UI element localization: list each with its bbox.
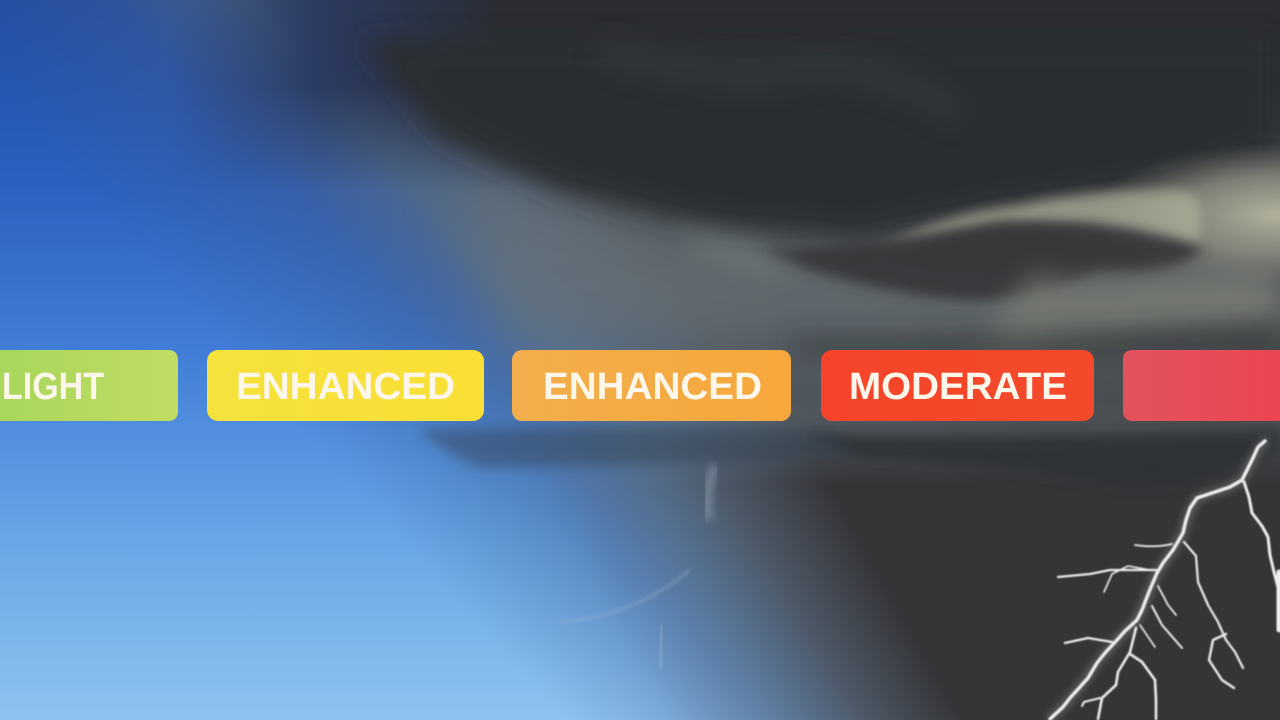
upper dark storm cloud xyxy=(191,0,1280,244)
lightning bolt xyxy=(1050,441,1280,719)
pill: enhanced yellow: ENHANCED xyxy=(236,366,455,408)
pill: enhanced orange xyxy=(512,350,791,421)
mid branch xyxy=(1184,542,1243,668)
right branch xyxy=(1244,482,1280,595)
pill: light: LIGHT xyxy=(2,366,104,408)
risk scale pills xyxy=(0,350,1280,421)
main bolt glow xyxy=(1050,441,1265,719)
pill: moderate: MODERATE xyxy=(849,366,1067,408)
pill: light xyxy=(0,350,178,421)
bright cloud highlights xyxy=(670,130,1280,350)
faint distant lightning xyxy=(560,465,715,670)
pill: enhanced yellow xyxy=(207,350,484,421)
lower dark storm area xyxy=(564,445,1280,720)
pill: high, cropped xyxy=(1123,350,1280,421)
main stem xyxy=(1050,441,1265,719)
lower fork xyxy=(1098,628,1136,719)
dark cloud band behind scale xyxy=(420,322,1280,486)
left branches xyxy=(1135,544,1172,546)
pill: moderate xyxy=(821,350,1094,421)
pill: enhanced orange: ENHANCED xyxy=(543,366,762,408)
mid grey cloud layer xyxy=(450,175,1280,345)
